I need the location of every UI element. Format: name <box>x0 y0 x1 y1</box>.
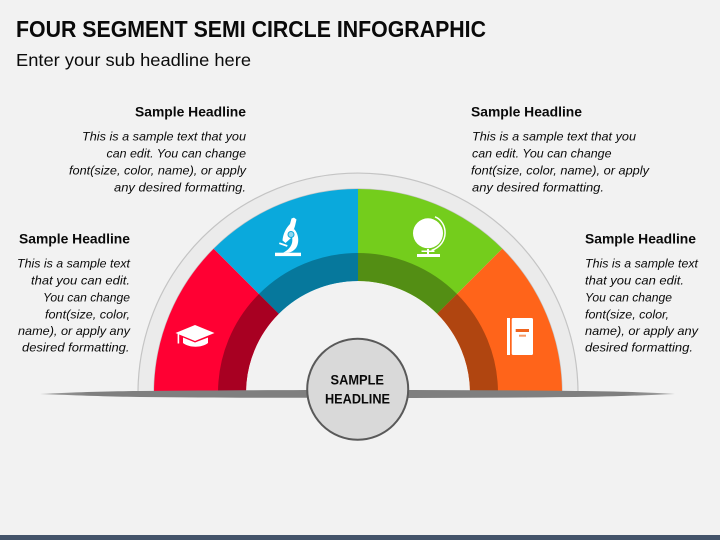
text block: right: desired formatting. <box>585 341 693 355</box>
text block: top left: font(size, color, name), or apply <box>69 164 247 178</box>
text block: right: Sample Headline <box>585 231 696 246</box>
inner ring: dark red <box>218 294 279 393</box>
base line bar <box>40 390 675 398</box>
segment: red <box>154 249 279 393</box>
center circle label <box>307 339 408 440</box>
text block: top right: any desired formatting. <box>472 181 604 195</box>
segment: green <box>358 189 502 314</box>
text block: right: font(size, color, <box>585 307 669 321</box>
footer bar <box>0 535 720 540</box>
text block: left: that you can edit. <box>31 273 130 287</box>
text block: right: You can change <box>585 290 672 304</box>
text block: left: font(size, color, <box>45 307 130 321</box>
inner ring: dark green <box>358 253 457 314</box>
segment: orange <box>437 249 562 393</box>
subtitle: Enter your sub headline here <box>16 50 251 70</box>
text block: left: This is a sample text <box>17 256 131 270</box>
text block: right: name), or apply any <box>585 324 699 338</box>
center circle label: SAMPLE <box>330 371 384 387</box>
icon: microscope <box>275 218 301 256</box>
segment: blue <box>214 189 358 314</box>
text block: left: name), or apply any <box>18 324 131 338</box>
text block: top left: any desired formatting. <box>114 181 246 195</box>
text block: top right <box>471 105 650 195</box>
icon: graduation cap <box>176 325 214 347</box>
text block: right <box>585 231 699 355</box>
text block: right: that you can edit. <box>585 273 684 287</box>
icon: book <box>507 318 533 355</box>
text block: top left: Sample Headline <box>135 105 246 120</box>
center circle label: HEADLINE <box>325 390 390 406</box>
semi circle chart <box>138 173 578 393</box>
text block: left: desired formatting. <box>22 341 130 355</box>
text block: left <box>17 231 131 355</box>
inner ring: dark orange <box>437 294 498 393</box>
title: FOUR SEGMENT SEMI CIRCLE INFOGRAPHIC <box>16 16 486 42</box>
text block: top left <box>69 105 247 195</box>
outer band <box>138 173 578 393</box>
text block: top right: This is a sample text that you <box>472 130 636 144</box>
icon: globe <box>413 217 445 257</box>
text block: top right: font(size, color, name), or apply <box>471 164 650 178</box>
text block: top left: This is a sample text that you <box>82 130 246 144</box>
text block: left: You can change <box>43 290 130 304</box>
text block: top right: Sample Headline <box>471 105 582 120</box>
inner ring: dark blue <box>259 253 358 314</box>
text block: top left: can edit. You can change <box>106 147 246 161</box>
text block: left: Sample Headline <box>19 231 130 246</box>
text block: top right: can edit. You can change <box>472 147 612 161</box>
text block: right: This is a sample text <box>585 256 699 270</box>
